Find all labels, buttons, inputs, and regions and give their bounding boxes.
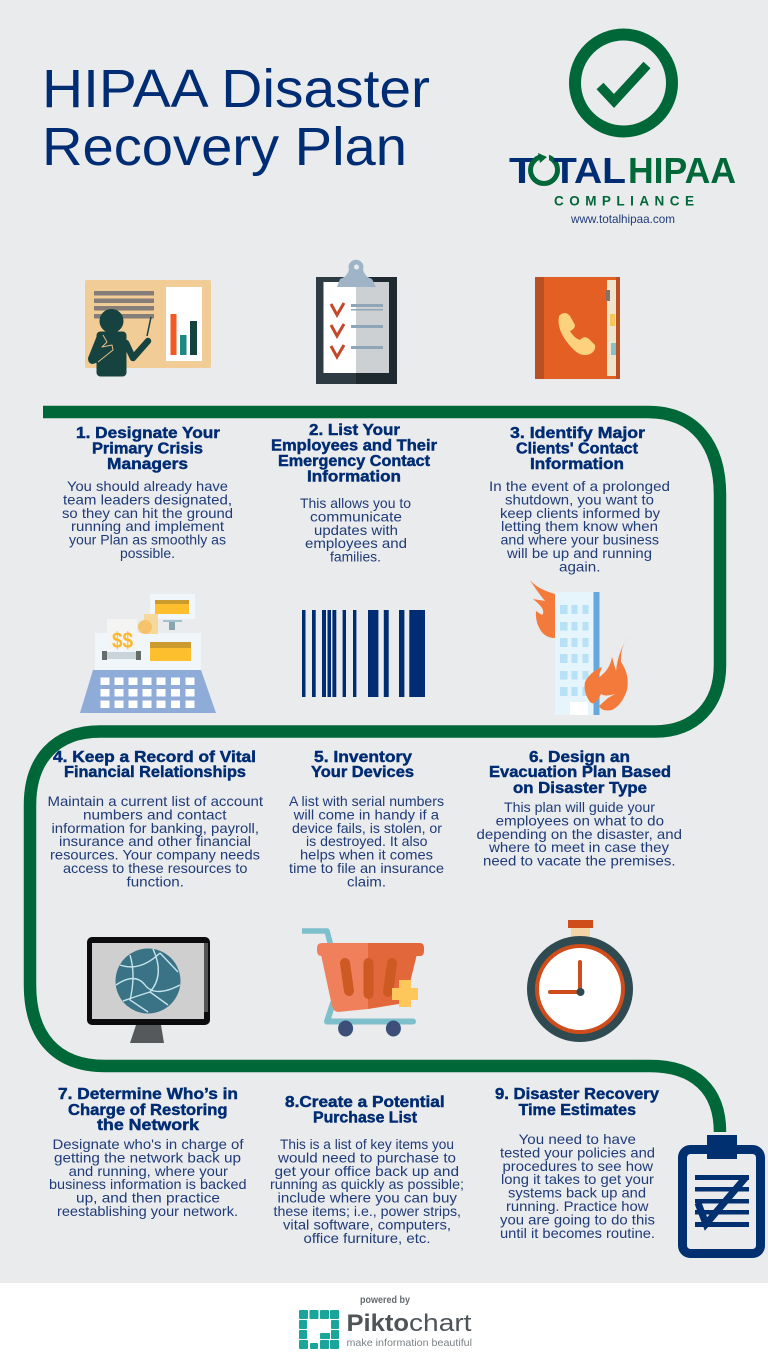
text: step 7: business information is backed bbox=[49, 1176, 247, 1192]
title: Recovery Plan bbox=[42, 117, 407, 177]
heading: step 6: on Disaster Type bbox=[513, 780, 647, 797]
logo: Total HIPAA Compliance bbox=[509, 34, 736, 226]
text: step 4 bbox=[48, 793, 263, 890]
text: step 4: information for banking, payroll, bbox=[52, 820, 259, 836]
heading: step 8: Purchase List bbox=[313, 1110, 417, 1127]
text: step 9: tested your policies and bbox=[500, 1144, 655, 1160]
heading: step 7: the Network bbox=[97, 1117, 199, 1134]
text: step 6: depending on the disaster, and bbox=[476, 826, 682, 842]
text: step 7 bbox=[49, 1136, 247, 1219]
text: step 3 bbox=[489, 478, 670, 574]
step 3 bbox=[489, 425, 670, 574]
text: step 7: getting the network back up bbox=[54, 1149, 241, 1165]
heading: step 2: Emergency Contact bbox=[278, 453, 430, 470]
heading: step 3: Information bbox=[530, 456, 624, 473]
text: step 8: office furniture, etc. bbox=[304, 1230, 430, 1246]
text: step 8: include where you can buy bbox=[278, 1190, 457, 1206]
text: step 2: employees and bbox=[305, 535, 407, 551]
logo wordmark: T bbox=[509, 150, 535, 191]
text: step 9: systems back up and bbox=[508, 1185, 646, 1201]
wordmark: Piktochart: chart bbox=[409, 1310, 472, 1337]
wordmark: Piktochart: Pikto bbox=[346, 1310, 409, 1337]
text: step 4: function. bbox=[126, 874, 184, 890]
icon: barcode bbox=[302, 610, 425, 697]
text: step 8 bbox=[270, 1136, 464, 1246]
step 5 bbox=[289, 749, 444, 890]
text: step 9: procedures to see how bbox=[502, 1158, 654, 1174]
text: step 4: insurance and other financial bbox=[59, 833, 251, 849]
text: step 5: A list with serial numbers bbox=[289, 793, 444, 809]
logo tagline: COMPLIANCE bbox=[554, 194, 694, 208]
icon: monitor with globe bbox=[87, 937, 210, 1043]
title bbox=[42, 59, 430, 177]
icon: navy clipboard bbox=[682, 1135, 760, 1254]
text: step 1: team leaders designated, bbox=[63, 491, 232, 507]
text: step 6: where to meet in case they bbox=[488, 839, 669, 855]
text: step 2: This allows you to bbox=[300, 495, 411, 511]
heading: step 1: 1. Designate Your bbox=[76, 425, 220, 442]
heading: step 3 bbox=[510, 425, 645, 473]
text: step 5: device fails, is stolen, or bbox=[292, 820, 442, 836]
heading: step 3: Clients' Contact bbox=[516, 440, 638, 458]
text: step 6 bbox=[476, 799, 682, 869]
heading: step 4 bbox=[53, 749, 256, 781]
text: step 9: You need to have bbox=[519, 1131, 636, 1147]
step 6 bbox=[476, 749, 682, 869]
text: step 7: Designate who's in charge of bbox=[52, 1136, 244, 1152]
heading: step 4: Financial Relationships bbox=[64, 764, 246, 781]
logo wordmark: HIPAA bbox=[628, 150, 736, 191]
text: step 3: In the event of a prolonged bbox=[489, 478, 670, 494]
icon: phone book bbox=[535, 277, 620, 379]
text: step 3: will be up and running bbox=[506, 545, 652, 561]
text: step 1: You should already have bbox=[67, 478, 228, 494]
heading: step 4: 4. Keep a Record of Vital bbox=[53, 749, 256, 766]
text: step 4: Maintain a current list of account bbox=[48, 793, 263, 809]
heading: step 5: 5. Inventory bbox=[314, 749, 412, 766]
text: step 8: get your office back up and bbox=[274, 1163, 459, 1179]
heading: step 1 bbox=[76, 425, 220, 473]
text: step 9: until it becomes routine. bbox=[500, 1225, 655, 1241]
text: step 8: running as quickly as possible; bbox=[270, 1176, 464, 1192]
text: step 3: and where your business bbox=[500, 532, 659, 548]
step 2 bbox=[271, 422, 437, 565]
heading: step 2: Information bbox=[307, 468, 401, 486]
text: step 5 bbox=[289, 793, 444, 890]
step 9 bbox=[495, 1086, 659, 1241]
text: step 8: these items; i.e., power strips, bbox=[274, 1203, 461, 1219]
step 7 bbox=[49, 1086, 247, 1219]
heading: step 2 bbox=[271, 422, 437, 486]
footer: powered by Piktochart bbox=[299, 1295, 472, 1349]
heading: step 2: 2. List Your bbox=[309, 422, 400, 439]
text: step 6: This plan will guide your bbox=[504, 799, 655, 815]
heading: step 6: 6. Design an bbox=[529, 749, 630, 766]
text: step 3: shutdown, you want to bbox=[505, 491, 654, 507]
icon: check circle bbox=[575, 34, 672, 132]
text: step 5: will come in handy if a bbox=[293, 806, 439, 822]
text: step 9: running. Practice how bbox=[506, 1198, 649, 1214]
logo wordmark bbox=[509, 150, 736, 191]
text: step 5: time to file an insurance bbox=[289, 860, 444, 876]
green connecting path bbox=[30, 412, 720, 1132]
heading: step 5: Your Devices bbox=[311, 764, 414, 781]
icon: clipboard checklist bbox=[316, 260, 397, 384]
heading: step 2: Employees and Their bbox=[271, 437, 437, 454]
text: step 1 bbox=[62, 478, 233, 561]
heading: step 1: Managers bbox=[107, 456, 188, 473]
text: step 9 bbox=[500, 1131, 655, 1241]
logo: Piktochart mark bbox=[299, 1310, 339, 1349]
text: step 5: claim. bbox=[347, 874, 386, 890]
heading: step 9: 9. Disaster Recovery bbox=[495, 1086, 659, 1103]
heading: step 5 bbox=[311, 749, 414, 781]
text: step 4: resources. Your company needs bbox=[50, 847, 260, 863]
wordmark: Piktochart bbox=[346, 1310, 472, 1337]
text: step 1: your Plan as smoothly as bbox=[69, 532, 226, 548]
text: step 5: is destroyed. It also bbox=[306, 833, 428, 849]
heading: step 8 bbox=[285, 1094, 445, 1127]
heading: step 3: 3. Identify Major bbox=[510, 425, 645, 442]
icon: cash register: $$ bbox=[112, 628, 133, 653]
text: step 3: keep clients informed by bbox=[500, 505, 660, 521]
website: www.totalhipaa.com bbox=[570, 212, 675, 226]
text: step 1: possible. bbox=[120, 545, 175, 561]
text: step 7: reestablishing your network. bbox=[57, 1203, 238, 1219]
text: step 3: letting them know when bbox=[501, 518, 658, 534]
heading: step 6: Evacuation Plan Based bbox=[489, 764, 671, 781]
icon: burning building bbox=[528, 577, 628, 715]
heading: step 1: Primary Crisis bbox=[92, 441, 203, 458]
text: step 4: numbers and contact bbox=[83, 806, 227, 822]
icon: cash register bbox=[80, 594, 216, 713]
title: HIPAA Disaster bbox=[42, 59, 430, 119]
step 4 bbox=[48, 749, 263, 890]
text: powered by: powered by bbox=[360, 1295, 410, 1306]
heading: step 7: Charge of Restoring bbox=[68, 1102, 228, 1119]
icon: presenter and chart bbox=[85, 280, 211, 376]
text: step 2 bbox=[300, 495, 411, 565]
text: step 7: and running, where your bbox=[69, 1163, 228, 1179]
step 8 bbox=[270, 1094, 464, 1246]
text: step 9: you are going to do this bbox=[500, 1211, 655, 1227]
text: step 3: again. bbox=[559, 558, 600, 574]
text: step 9: long it takes to get your bbox=[501, 1171, 654, 1187]
text: step 1: so they can hit the ground bbox=[62, 505, 233, 521]
icon: shopping cart bbox=[302, 931, 424, 1036]
text: step 5: helps when it comes bbox=[300, 847, 433, 863]
heading: step 7: 7. Determine Who’s in bbox=[58, 1086, 238, 1103]
text: step 6: need to vacate the premises. bbox=[483, 853, 676, 869]
heading: step 8: 8.Create a Potential bbox=[285, 1094, 445, 1111]
text: step 2: updates with bbox=[314, 522, 398, 538]
text: step 8: This is a list of key items you bbox=[280, 1136, 454, 1152]
heading: step 9 bbox=[495, 1086, 659, 1119]
text: step 8: vital software, computers, bbox=[283, 1216, 451, 1232]
text: step 2: communicate bbox=[310, 508, 402, 524]
text: step 8: would need to purchase to bbox=[277, 1149, 456, 1165]
text: step 1: running and implement bbox=[71, 518, 224, 534]
heading: step 9: Time Estimates bbox=[519, 1102, 636, 1119]
text: step 2: families. bbox=[330, 549, 381, 565]
heading: step 7 bbox=[58, 1086, 238, 1134]
icon: stopwatch bbox=[527, 920, 633, 1042]
text: step 6: employees on what to do bbox=[496, 812, 664, 828]
heading: step 6 bbox=[489, 749, 671, 797]
step 1 bbox=[62, 425, 233, 561]
text: step 4: access to these resources to bbox=[63, 860, 248, 876]
text: step 7: up, and then practice bbox=[76, 1190, 220, 1206]
tagline: make information beautiful bbox=[346, 1337, 472, 1349]
logo wordmark: TAL bbox=[553, 150, 626, 191]
